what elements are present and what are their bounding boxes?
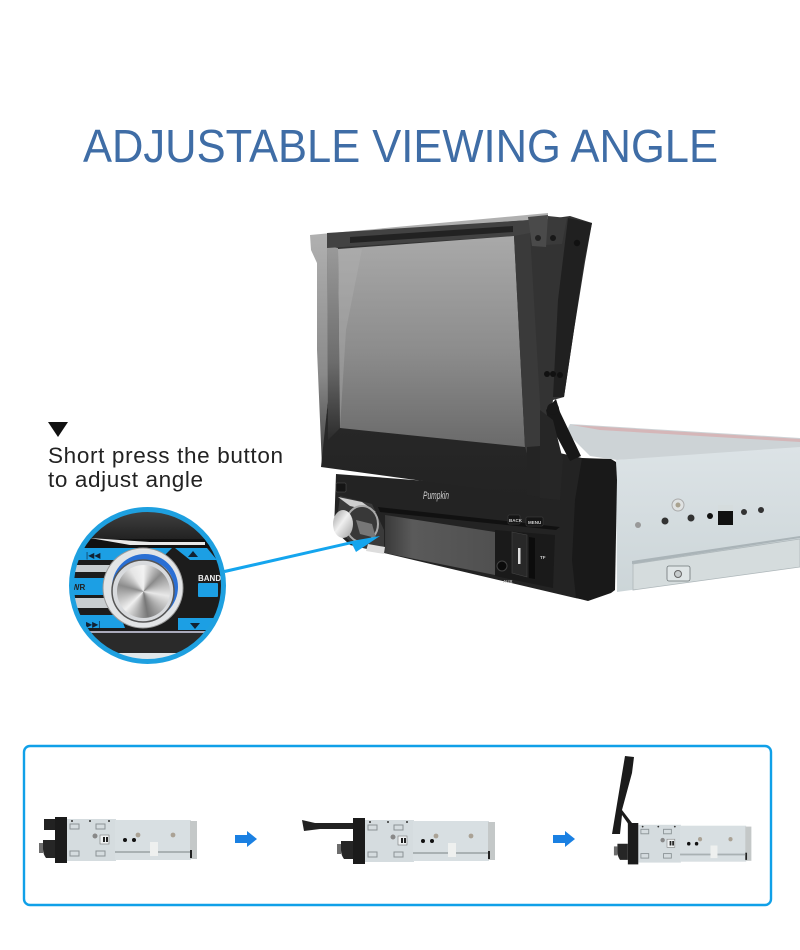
panel: folding sequence — [24, 746, 771, 905]
magnified knob callout: ▶▶| — [86, 620, 100, 629]
instruction text: to adjust angle — [48, 467, 203, 492]
arrow 1 — [235, 831, 257, 847]
magnified knob callout — [70, 508, 226, 665]
top bezel band — [327, 220, 530, 248]
rear bracket layers — [528, 215, 592, 397]
faceplate: TF — [540, 555, 546, 560]
step 1: closed unit — [39, 817, 197, 863]
chrome button cluster — [333, 496, 385, 554]
step 3: screen raised — [612, 756, 751, 864]
magnified knob callout: BAND — [198, 574, 221, 583]
faceplate — [333, 452, 587, 600]
faceplate: Pumpkin — [423, 490, 449, 502]
callout line to button — [224, 536, 380, 573]
magnified knob callout: |◀◀ — [86, 551, 101, 560]
title: ADJUSTABLE VIEWING ANGLE — [83, 120, 718, 172]
faceplate: MENU — [528, 520, 541, 525]
ghost screen positions — [310, 213, 592, 490]
left bezel fade — [327, 246, 340, 440]
step 2: screen sliding out — [302, 818, 495, 864]
faceplate: AUX — [503, 579, 513, 584]
knob — [103, 548, 183, 628]
pivot arm — [546, 399, 581, 461]
arrow 2 — [553, 831, 575, 847]
instruction text: Short press the button — [48, 443, 283, 468]
metal chassis — [566, 424, 800, 592]
magnified knob callout: WR — [72, 583, 86, 592]
end cap — [572, 458, 617, 601]
instruction marker triangle — [48, 422, 68, 437]
faceplate: BACK — [509, 518, 523, 523]
screen glass — [338, 236, 525, 447]
radio unit with adjustable screen — [310, 213, 800, 601]
screen bezel — [321, 220, 540, 497]
